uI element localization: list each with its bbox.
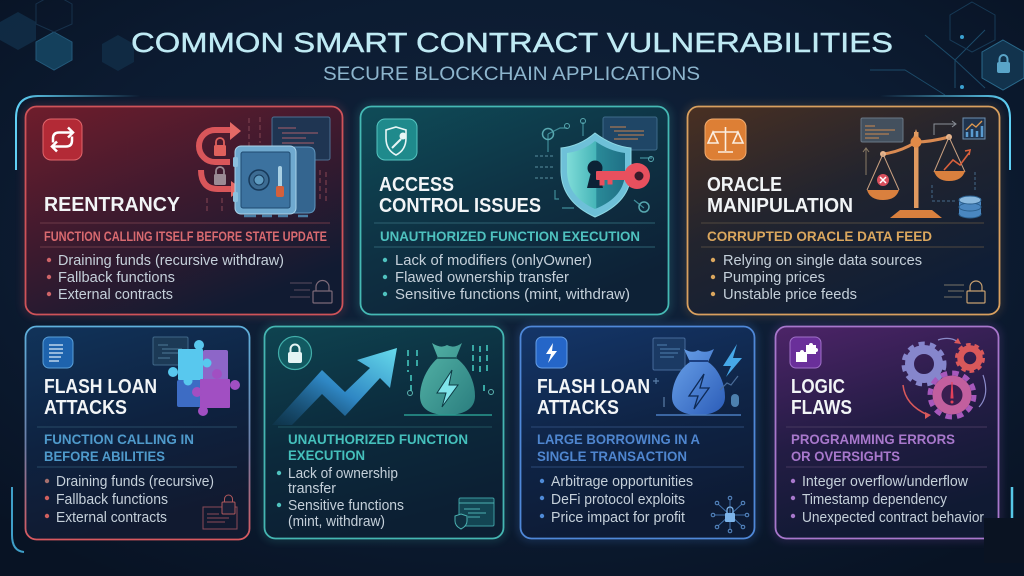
bullet list: External contracts — [56, 510, 167, 526]
background hexagon pattern left — [0, 0, 134, 71]
icon: repeat arrows — [43, 119, 82, 160]
illustration: tilted scale with data — [861, 118, 985, 218]
subheading: FUNCTION CALLING ITSELF BEFORE STATE UPDATE — [44, 228, 327, 244]
subheading — [537, 431, 700, 464]
bullet list: Relying on single data sources — [723, 253, 922, 269]
icon: small padlock — [290, 280, 332, 303]
subheading: UNAUTHORIZED FUNCTION EXECUTION — [380, 228, 640, 244]
heading: FLASH LOAN — [537, 375, 650, 398]
icon: code window with shield — [455, 498, 494, 529]
bullet list: Price impact for profit — [551, 510, 685, 526]
icon: network padlock — [711, 496, 749, 533]
bullet list: Fallback functions — [56, 492, 168, 508]
icon: balance scale — [705, 119, 746, 160]
subheading: PROGRAMMING ERRORS — [791, 431, 955, 447]
subheading: CORRUPTED ORACLE DATA FEED — [707, 228, 932, 244]
heading second line: FLAWS — [791, 396, 852, 419]
panel: flash loan attacks with puzzle — [26, 326, 250, 540]
illustration: rising arrow — [272, 348, 397, 425]
illustration: puzzle pieces — [153, 337, 240, 416]
illustration: safe with reentrant arrows — [199, 117, 330, 216]
bullet list — [47, 253, 284, 303]
bullet list: Draining funds (recursive withdraw) — [58, 253, 284, 269]
corner mask box — [984, 518, 1024, 563]
bullet list: (mint, withdraw) — [288, 514, 385, 530]
subheading: BEFORE ABILITIES — [44, 448, 165, 464]
subheading — [44, 431, 194, 464]
bullet list — [540, 474, 693, 526]
heading: FLASH LOAN — [44, 375, 157, 398]
subheading: EXECUTION — [288, 447, 365, 463]
icon: small padlock — [944, 281, 985, 303]
bullet list: DeFi protocol exploits — [551, 492, 685, 508]
bullet list — [383, 253, 630, 303]
subtitle: SECURE BLOCKCHAIN APPLICATIONS — [323, 64, 700, 85]
heading: LOGIC — [791, 375, 845, 398]
bullet list: Lack of ownership — [288, 466, 398, 482]
bullet list — [791, 474, 984, 526]
icon: shield key — [377, 119, 417, 160]
subheading: UNAUTHORIZED FUNCTION — [288, 431, 468, 447]
bullet list: Arbitrage opportunities — [551, 474, 693, 490]
panel: flash loan attacks with money bag — [520, 326, 755, 539]
heading: ACCESS — [379, 173, 454, 196]
bullet list: transfer — [288, 481, 336, 497]
bullet list: Unstable price feeds — [723, 287, 857, 303]
icon: document list — [43, 337, 73, 368]
icon: padlock circle — [278, 336, 312, 370]
illustration: gears — [903, 338, 986, 419]
glowing frame corners — [12, 96, 1012, 554]
heading: REENTRANCY — [44, 193, 180, 216]
title: COMMON SMART CONTRACT VULNERABILITIES — [131, 27, 893, 58]
icon: puzzle pieces — [790, 337, 821, 368]
subheading: SINGLE TRANSACTION — [537, 448, 687, 464]
heading: ORACLE — [707, 173, 782, 196]
panel: access control issues — [360, 106, 669, 315]
bullet list: Timestamp dependency — [802, 492, 948, 508]
icon: code window padlock — [203, 495, 237, 529]
bullet list: Unexpected contract behavior — [802, 510, 984, 526]
bullet list: Fallback functions — [58, 270, 175, 286]
panel: unauthorized function execution — [264, 326, 504, 539]
heading second line: ATTACKS — [537, 396, 619, 419]
panel: reentrancy — [25, 106, 343, 315]
subheading — [791, 431, 955, 464]
bullet list: Pumping prices — [723, 270, 825, 286]
heading second line: CONTROL ISSUES — [379, 194, 541, 217]
bullet list: Sensitive functions (mint, withdraw) — [395, 287, 630, 303]
bullet list: Draining funds (recursive) — [56, 474, 214, 490]
bullet list: Integer overflow/underflow — [802, 474, 968, 490]
illustration: blue money bag — [653, 338, 742, 415]
background circuit and lock hexagon right — [870, 2, 1024, 95]
illustration: money bag with lightning — [404, 343, 494, 415]
icon: lightning — [536, 337, 567, 368]
bullet list: External contracts — [58, 287, 173, 303]
subheading: OR OVERSIGHTS — [791, 448, 900, 464]
heading second line: ATTACKS — [44, 396, 127, 419]
bullet list: Sensitive functions — [288, 498, 404, 514]
bullet list — [45, 474, 214, 526]
panel: logic flaws — [775, 326, 999, 539]
heading second line: MANIPULATION — [707, 194, 853, 217]
illustration: shield and key — [535, 117, 657, 217]
panel: oracle manipulation — [687, 106, 1000, 315]
bullet list: Flawed ownership transfer — [395, 270, 569, 286]
bullet list: Lack of modifiers (onlyOwner) — [395, 253, 592, 269]
bullet list — [711, 253, 922, 303]
bullet list — [277, 466, 404, 530]
subheading — [288, 431, 468, 463]
subheading: LARGE BORROWING IN A — [537, 431, 700, 447]
subheading: FUNCTION CALLING IN — [44, 431, 194, 447]
